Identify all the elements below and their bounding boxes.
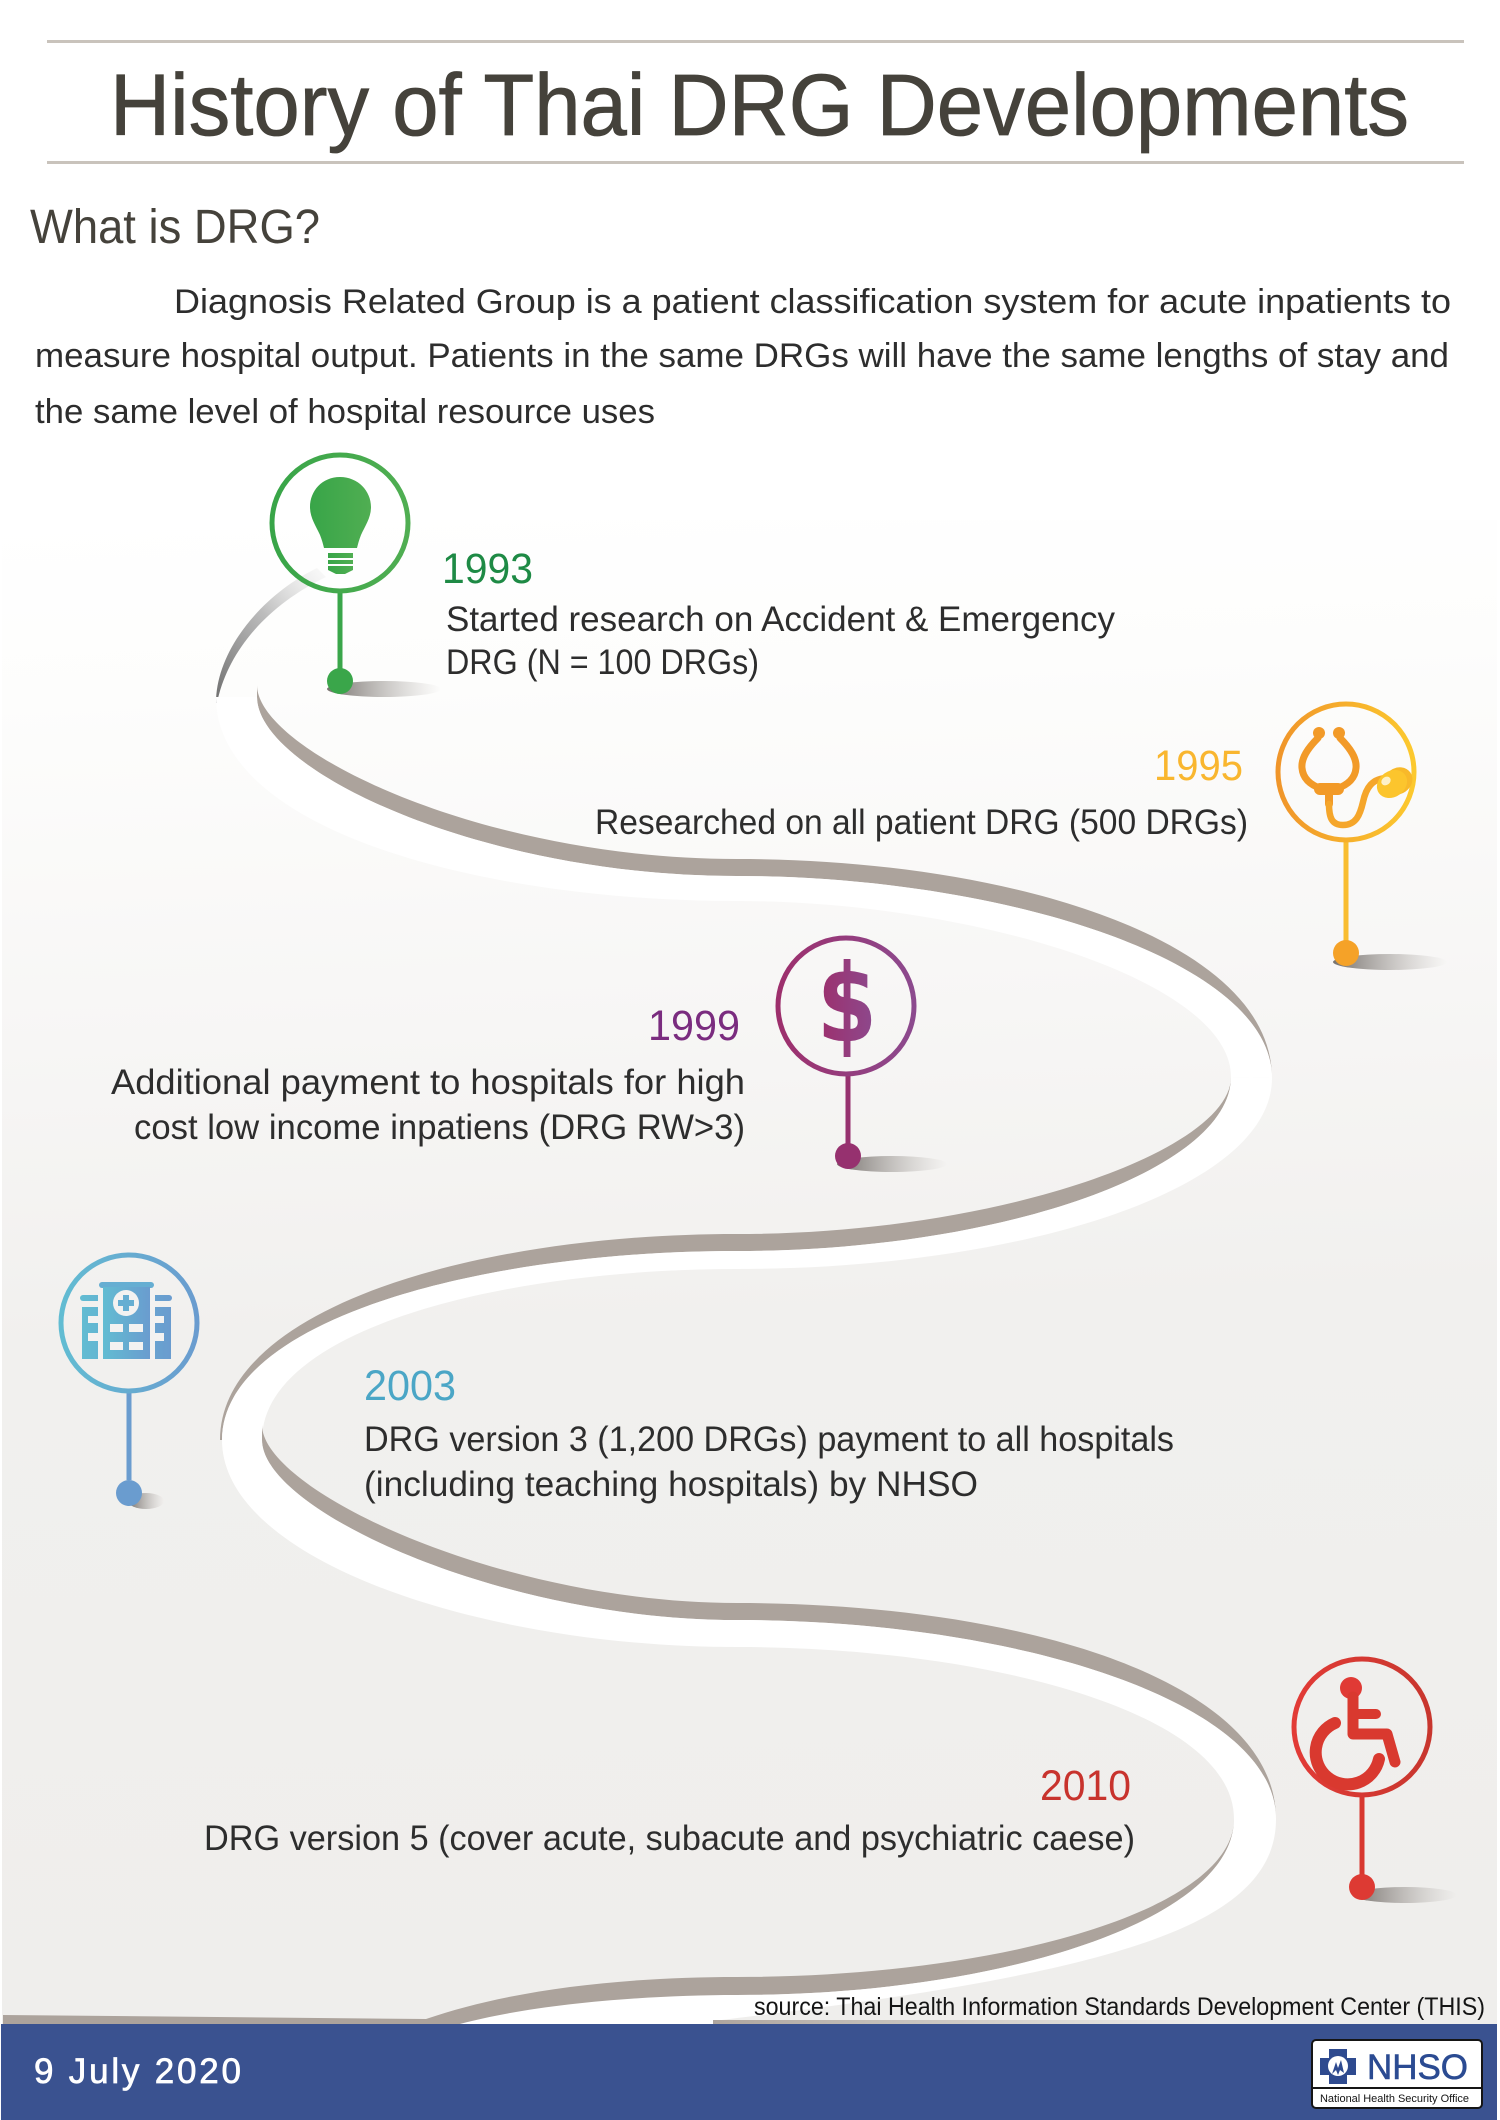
icon: light bulb — [310, 477, 371, 574]
road tail shadow at start — [216, 568, 326, 703]
pin 2003: hospital — [61, 1255, 197, 1509]
title: History of Thai DRG Developments — [110, 57, 1409, 154]
item 1999: cost low income inpatiens (DRG RW>3) — [134, 1108, 745, 1147]
item 1995 — [595, 742, 1248, 842]
item 2010 — [204, 1762, 1135, 1858]
icon: dollar sign: $ — [817, 942, 877, 1067]
footer band — [1, 2024, 1497, 2120]
pin 1995: stethoscope — [1278, 704, 1447, 970]
item 1993: 1993 — [442, 545, 533, 593]
pin 1999: dollar — [778, 938, 947, 1172]
item 1993: Started research on Accident & Emergency — [446, 600, 1115, 639]
road segment 2 — [220, 1077, 1272, 1440]
item 1999: 1999 — [648, 1002, 740, 1050]
intro paragraph: Diagnosis Related Group is a patient classification system for acute inpatients to — [174, 283, 1451, 321]
header rule top — [47, 40, 1464, 43]
header rule bottom — [47, 161, 1464, 164]
item 2010: 2010 — [1040, 1762, 1131, 1810]
background panel — [2, 520, 1497, 2024]
intro paragraph: measure hospital output. Patients in the same DRGs will have the same lengths of stay and — [35, 337, 1449, 375]
item 2003: 2003 — [364, 1362, 456, 1410]
NHSO logo — [1312, 2040, 1482, 2108]
item 2003: DRG version 3 (1,200 DRGs) payment to all hospitals — [364, 1420, 1174, 1459]
icon: hospital building — [80, 1282, 172, 1360]
icon: stethoscope — [1302, 727, 1418, 825]
pin 2010: wheelchair — [1294, 1659, 1457, 1903]
heading: What is DRG: What is DRG? — [30, 201, 320, 254]
item 2010: DRG version 5 (cover acute, subacute and psychiatric caese) — [204, 1819, 1135, 1858]
item 2003 — [364, 1362, 1174, 1504]
logo cross — [1320, 2049, 1356, 2084]
item 1995: 1995 — [1154, 742, 1243, 790]
item 1993: DRG (N = 100 DRGs) — [446, 643, 759, 682]
item 1995: Researched on all patient DRG (500 DRGs) — [595, 803, 1248, 842]
icon: wheelchair — [1316, 1677, 1395, 1784]
logo wordmark: NHSO — [1367, 2048, 1468, 2087]
logo subtitle: National Health Security Office — [1320, 2093, 1469, 2105]
intro paragraph — [35, 283, 1451, 431]
road segment 3 — [222, 1425, 1276, 1819]
winding road — [3, 568, 1276, 2024]
pin 1993: light bulb — [272, 455, 441, 697]
road segment 1 — [216, 685, 1272, 1078]
item 1999 — [111, 1002, 745, 1147]
intro paragraph: the same level of hospital resource uses — [35, 393, 655, 431]
road segment 4 — [3, 1819, 1276, 2024]
item 2003: (including teaching hospitals) by NHSO — [364, 1465, 978, 1504]
item 1993 — [442, 545, 1115, 682]
footer date: 9 July 2020 — [34, 2052, 241, 2091]
item 1999: Additional payment to hospitals for high — [111, 1063, 745, 1102]
